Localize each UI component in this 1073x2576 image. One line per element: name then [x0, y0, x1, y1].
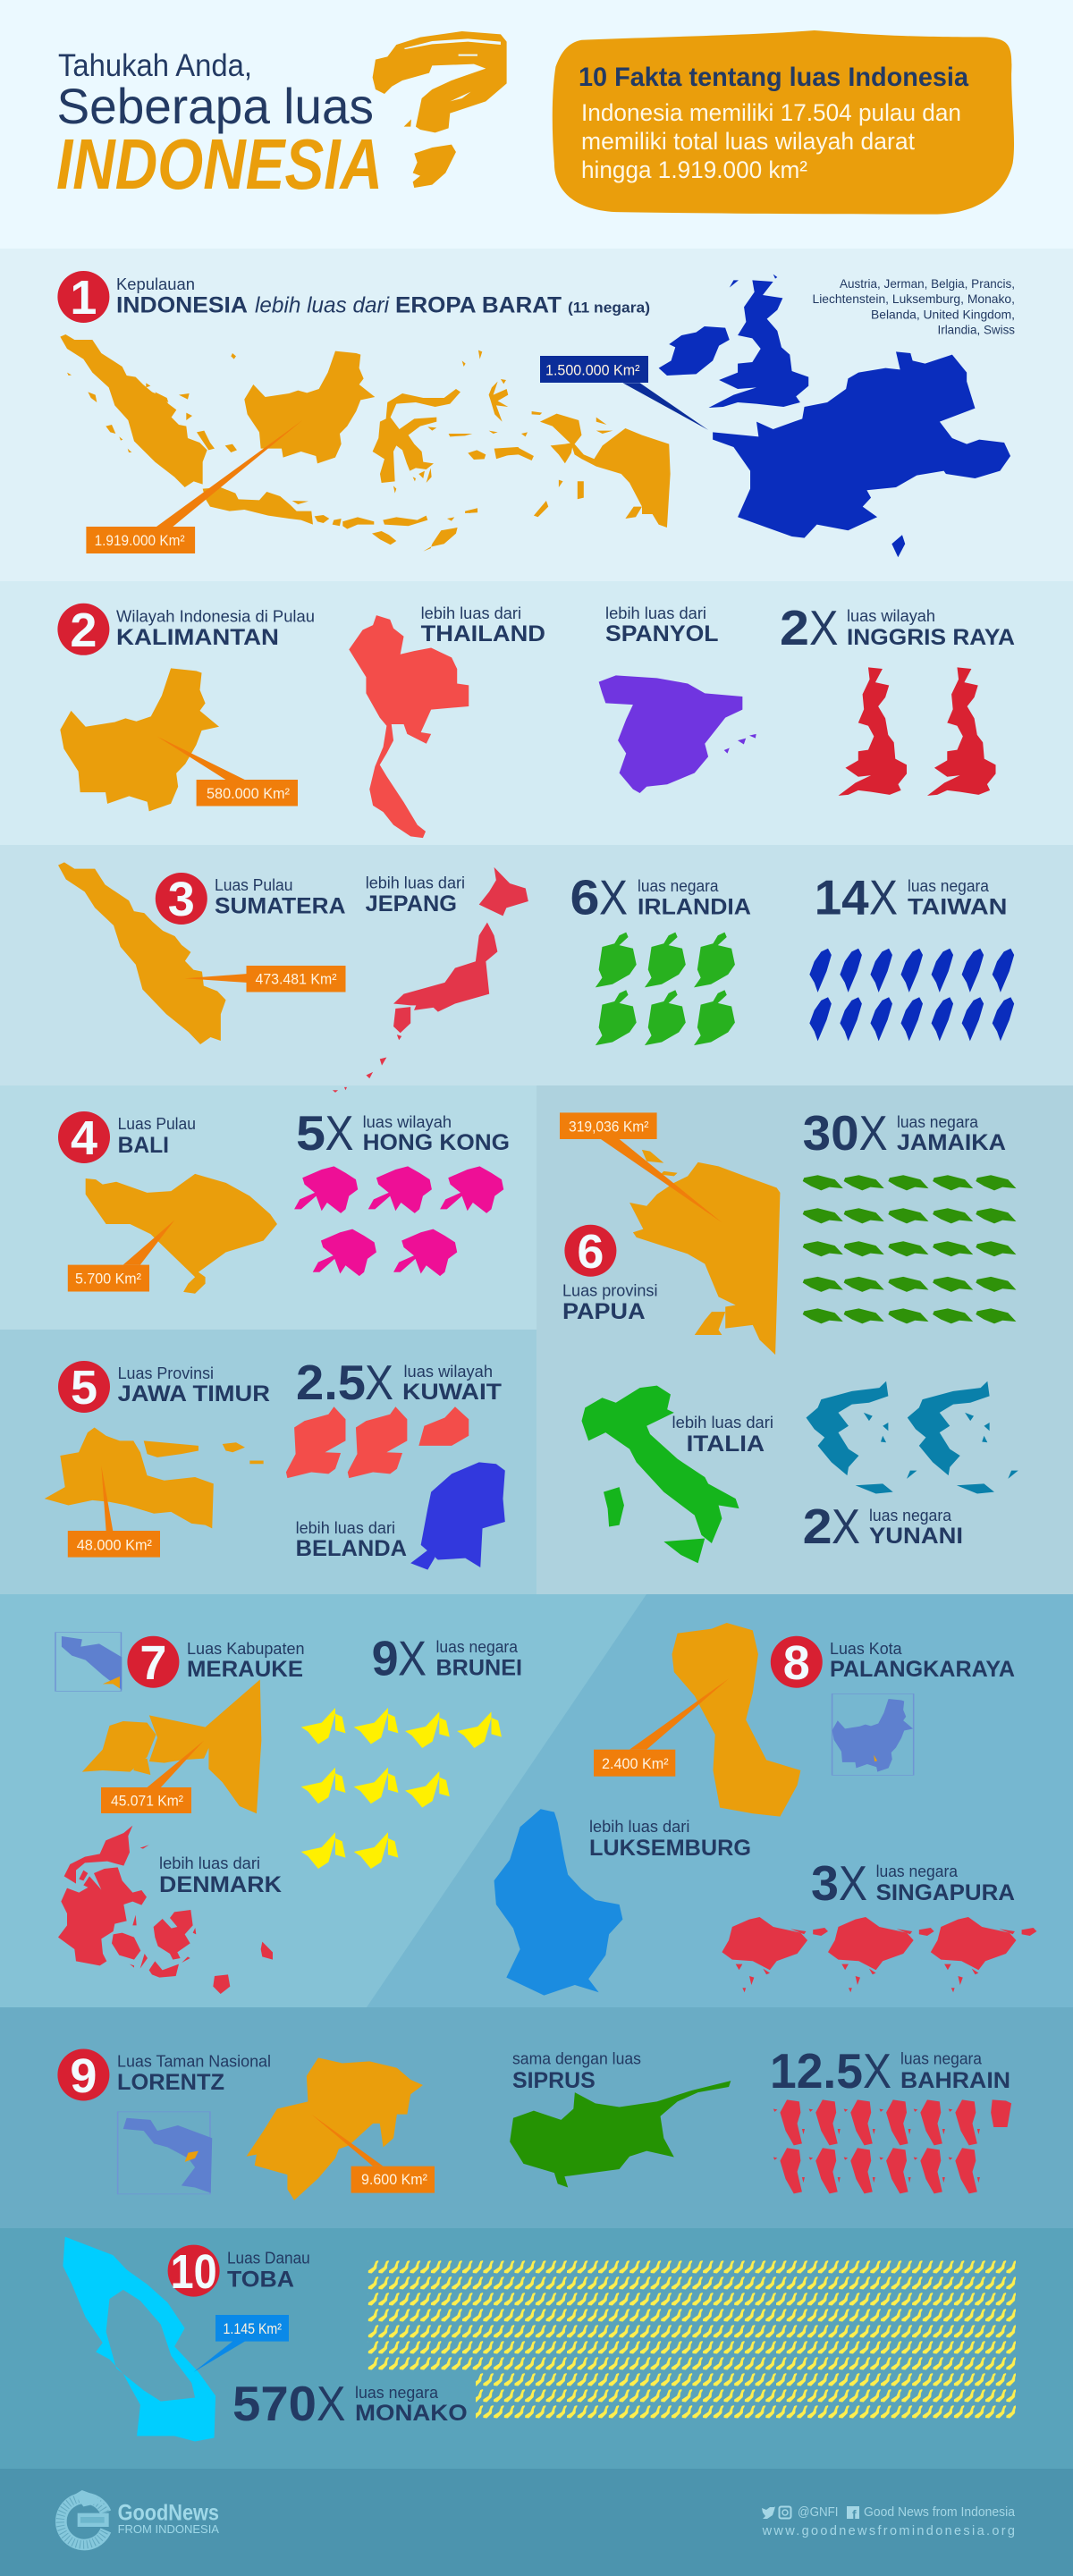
heading: 570X Monako: 570 [232, 2376, 317, 2431]
callout: 10 fakta: Indonesia memiliki 17.504 pulau dan [581, 99, 961, 126]
heading: 2X Yunani: YUNANI [869, 1524, 963, 1549]
badge 5: 5 [71, 1361, 97, 1415]
heading: 3X Singapura: X [839, 1855, 867, 1911]
heading: 3X Singapura [811, 1855, 1015, 1911]
heading: Luksemburg [589, 1817, 751, 1861]
text: list of countries: Belanda, United Kingdom, [871, 308, 1015, 322]
heading: 2X Yunani [803, 1499, 963, 1554]
callout: 580.000 km2 [157, 737, 298, 807]
badge 6 [564, 1225, 616, 1279]
heading: Siprus: SIPRUS [512, 2068, 596, 2093]
map: Kalimantan [60, 668, 219, 811]
heading: Spanyol: lebih luas dari [605, 604, 706, 622]
heading: Thailand: THAILAND [421, 621, 545, 646]
badge 3: 3 [168, 873, 195, 926]
map: Jawa Timur [45, 1428, 264, 1528]
icons: 3 Singapore maps [722, 1917, 1036, 1992]
map: Belanda [410, 1462, 505, 1570]
inset: Kalimantan locator [832, 1693, 914, 1775]
heading: 3X Singapura: SINGAPURA [876, 1880, 1015, 1905]
heading fact 1: Kepulauan [116, 274, 195, 293]
callout: 319,036 km2 [560, 1112, 722, 1222]
heading: 570X Monako: MONAKO [355, 2401, 468, 2426]
callout: 1.145 km2: 1.145 Km² [224, 2320, 282, 2337]
heading: Bali: BALI [118, 1133, 169, 1158]
heading: 14X Taiwan: 14 [815, 870, 869, 925]
heading: Jawa Timur: Luas Provinsi [118, 1364, 214, 1382]
heading: 6X Irlandia: luas negara [638, 876, 719, 895]
icon: Japan island tail [333, 1087, 347, 1093]
text: list of countries: Austria, Jerman, Belgia, Prancis, [840, 276, 1015, 291]
heading: Bali: Luas Pulau [118, 1114, 196, 1133]
map: Thailand [349, 615, 469, 838]
map: Cyprus [510, 2081, 731, 2187]
heading: Palangkaraya [830, 1639, 1015, 1682]
heading: 570X Monako: luas negara [355, 2383, 439, 2402]
heading fact 1: (11 negara) [568, 299, 650, 317]
heading: 5X Hong Kong [296, 1105, 510, 1161]
heading: Thailand: lebih luas dari [421, 604, 521, 622]
badge 7 [127, 1636, 179, 1690]
text: website: www.goodnewsfromindonesia.org [762, 2524, 1015, 2538]
heading: 12.5X Bahrain [770, 2043, 1010, 2099]
heading: 2.5X Kuwait: X [365, 1355, 393, 1410]
heading: 3X Singapura: luas negara [876, 1862, 959, 1880]
heading: 30X Jamaika: luas negara [897, 1112, 979, 1131]
heading fact 1 [116, 274, 650, 318]
callout: 319,036 km2: 319,036 Km² [569, 1118, 649, 1136]
heading: 570X Monako [232, 2376, 468, 2431]
heading: Lorentz: LORENTZ [117, 2070, 224, 2095]
icons: 30 Jamaica maps [803, 1175, 1016, 1323]
icons: 9 Brunei maps [301, 1708, 502, 1869]
heading: 30X Jamaika [803, 1105, 1006, 1161]
badge 7: 7 [139, 1636, 166, 1690]
badge 6: 6 [577, 1225, 604, 1279]
heading: Jepang: JEPANG [366, 891, 457, 916]
heading: 12.5X Bahrain: 12.5 [770, 2043, 863, 2099]
callout: 48.000 km2: 48.000 Km² [77, 1536, 152, 1554]
title: INDONESIA: INDONESIA [56, 124, 383, 204]
heading: 570X Monako: X [317, 2376, 345, 2431]
icons: 2.5 Kuwait maps [286, 1406, 469, 1478]
heading: 2X Inggris Raya: X [809, 600, 839, 655]
callout: 45.071 km2 [101, 1741, 204, 1813]
badge 2 [57, 604, 109, 657]
heading: Palangkaraya: PALANGKARAYA [830, 1657, 1015, 1682]
callout: 580.000 km2: 580.000 Km² [207, 785, 290, 802]
heading: Lorentz [117, 2051, 271, 2095]
panel: fact 2 [0, 581, 1073, 845]
map: Italy [582, 1386, 739, 1563]
heading: Italia [672, 1413, 773, 1457]
panel: header [0, 0, 1073, 249]
heading: 12.5X Bahrain: X [863, 2043, 891, 2099]
panel: fact 9 [0, 2007, 1073, 2228]
badge 9 [57, 2049, 109, 2103]
map: Japan [366, 867, 528, 1078]
heading: Toba [227, 2248, 310, 2293]
map: Lorentz [247, 2057, 423, 2200]
heading: 5X Hong Kong: luas wilayah [363, 1112, 452, 1131]
heading: Kalimantan [116, 606, 315, 650]
map: Luksemburg [494, 1809, 622, 1996]
heading: Merauke [187, 1639, 305, 1682]
callout: 45.071 km2: 45.071 Km² [111, 1792, 183, 1809]
heading: Spanyol [605, 604, 719, 646]
callout: 10 fakta [553, 30, 1014, 215]
heading: 14X Taiwan [815, 870, 1007, 925]
panel: fact 6 [536, 1085, 1073, 1594]
icon: instagram [780, 2507, 790, 2518]
heading: 6X Irlandia: X [599, 870, 628, 925]
logo: GoodNews text [118, 2500, 219, 2536]
map: Danau Toba [63, 2237, 215, 2442]
heading: 14X Taiwan: TAIWAN [908, 895, 1007, 920]
map: Denmark [58, 1826, 273, 1994]
heading: Toba: TOBA [227, 2268, 294, 2293]
heading: Lorentz: Luas Taman Nasional [117, 2051, 271, 2071]
inset: Papua locator [55, 1633, 122, 1691]
icon: twitter [762, 2506, 775, 2519]
panel: fact 4 [0, 1085, 536, 1330]
text: list of countries: Irlandia, Swiss [937, 322, 1015, 336]
callout: 473.481 km2: 473.481 Km² [256, 971, 337, 988]
panel: fact 5 [0, 1330, 536, 1594]
callout: 473.481 km2 [185, 966, 345, 992]
heading: Siprus: sama dengan luas [512, 2049, 641, 2068]
icons: 570 Monaco maps [368, 2260, 1016, 2421]
heading: Palangkaraya: Luas Kota [830, 1639, 902, 1658]
text: list of countries [812, 276, 1015, 336]
heading: Papua: Luas provinsi [562, 1281, 658, 1300]
map: Indonesia [60, 334, 671, 552]
map: Bali [86, 1174, 277, 1294]
heading: 30X Jamaika: 30 [803, 1105, 859, 1161]
panel: footer [0, 2469, 1073, 2576]
heading: Thailand [421, 604, 545, 646]
icons: 6 Ireland maps [596, 933, 735, 1045]
callout: 1.919.000 km2 [86, 420, 302, 553]
callout: 1.919.000 km2: 1.919.000 Km² [95, 532, 185, 549]
callout: 9.600 km2: 9.600 Km² [361, 2171, 427, 2188]
heading: Belanda: lebih luas dari [296, 1518, 395, 1537]
map: Merauke [82, 1679, 261, 1813]
text: Good News from Indonesia: Good News from Indonesia [864, 2504, 1016, 2520]
heading: 30X Jamaika: JAMAIKA [897, 1130, 1006, 1155]
map: Spain [599, 675, 756, 793]
heading: 14X Taiwan: luas negara [908, 876, 990, 895]
callout: 9.600 km2 [311, 2115, 435, 2193]
heading: Merauke: MERAUKE [187, 1657, 303, 1682]
heading: Denmark: lebih luas dari [159, 1854, 260, 1872]
badge 2: 2 [70, 604, 97, 657]
callout: 2.400 km2: 2.400 Km² [602, 1755, 669, 1772]
heading: Denmark: DENMARK [159, 1872, 282, 1897]
callout: 10 fakta: hingga 1.919.000 km² [581, 156, 807, 183]
callout: 1.500.000 km2 [540, 356, 708, 430]
heading: 9X Brunei: 9 [372, 1630, 399, 1685]
heading: Belanda [296, 1518, 407, 1561]
icons: 14 Taiwan maps [809, 949, 1014, 1041]
heading: 2X Inggris Raya: luas wilayah [847, 606, 935, 625]
heading: 2X Yunani: 2 [803, 1499, 832, 1554]
heading: Merauke: Luas Kabupaten [187, 1639, 305, 1658]
icons: 12.5 Bahrain maps [773, 2099, 1011, 2193]
heading: 2.5X Kuwait: luas wilayah [404, 1362, 493, 1381]
heading: 2X Yunani: X [832, 1499, 860, 1554]
heading: 6X Irlandia: 6 [570, 870, 599, 925]
panel: fact 8 [367, 1594, 1073, 2007]
callout: 5.700 km2: 5.700 Km² [75, 1271, 141, 1288]
badge 3 [156, 873, 207, 926]
heading: Jawa Timur [118, 1364, 270, 1406]
heading: Bali [118, 1114, 196, 1158]
heading: Kalimantan: Wilayah Indonesia di Pulau [116, 606, 315, 625]
badge 1 [57, 271, 109, 325]
heading: 2.5X Kuwait: 2.5 [296, 1355, 366, 1410]
text: GNFI handle: @GNFI [798, 2504, 839, 2520]
icons: 2 UK maps [838, 667, 996, 796]
badge 8 [771, 1636, 823, 1690]
icon: facebook [847, 2506, 859, 2521]
badge 5 [58, 1361, 110, 1415]
title: Tahukah Anda: Tahukah Anda, [58, 48, 252, 83]
heading: 30X Jamaika: X [859, 1105, 888, 1161]
icons: 5 Hong Kong maps [294, 1166, 503, 1276]
heading: Toba: Luas Danau [227, 2248, 310, 2268]
callout: 10 fakta: 10 Fakta tentang luas Indonesia [579, 63, 968, 92]
callout: 2.400 km2 [594, 1678, 729, 1777]
heading: Sumatera: Luas Pulau [215, 875, 293, 894]
logo: GoodNews emblem [60, 2490, 109, 2545]
heading: Jepang [366, 873, 465, 916]
title: Seberapa luas: Seberapa luas [57, 78, 374, 134]
heading: Jepang: lebih luas dari [366, 873, 465, 892]
panel: fact 7 [0, 1594, 1073, 2007]
inset: Papua locator [118, 2112, 212, 2194]
panel: fact 1 [0, 249, 1073, 581]
text: list of countries: Liechtenstein, Luksemburg, Monako, [812, 291, 1015, 306]
heading: Denmark [159, 1854, 282, 1897]
heading: Kalimantan: KALIMANTAN [116, 625, 279, 650]
heading: Italia: lebih luas dari [672, 1413, 773, 1432]
heading: Sumatera [215, 875, 345, 919]
badge 4 [58, 1111, 110, 1165]
heading: 2X Inggris Raya: 2 [780, 600, 809, 655]
heading: Spanyol: SPANYOL [605, 621, 719, 646]
heading: Jawa Timur: JAWA TIMUR [118, 1381, 270, 1406]
callout: 10 fakta: memiliki total luas wilayah darat [581, 128, 915, 155]
heading: 2X Yunani: luas negara [869, 1506, 952, 1524]
heading: 9X Brunei: X [398, 1630, 427, 1685]
logo: GoodNews text: FROM INDONESIA [118, 2522, 219, 2536]
heading: 5X Hong Kong: HONG KONG [363, 1130, 510, 1155]
panel: fact 3 [0, 845, 1073, 1085]
callout: 1.500.000 km2: 1.500.000 Km² [545, 361, 640, 379]
heading: 5X Hong Kong: 5 [296, 1105, 325, 1161]
badge 9: 9 [70, 2049, 97, 2103]
heading: 2.5X Kuwait: KUWAIT [402, 1380, 502, 1405]
heading: Luksemburg: LUKSEMBURG [589, 1836, 751, 1861]
heading: Papua [562, 1281, 658, 1324]
heading: Siprus [512, 2049, 641, 2093]
heading fact 1: EROPA BARAT [395, 293, 562, 318]
map: Western Europe [659, 274, 1010, 557]
map: Papua [629, 1150, 780, 1355]
heading: 6X Irlandia: IRLANDIA [638, 895, 751, 920]
map: Palangkaraya [672, 1623, 800, 1817]
heading: 9X Brunei: luas negara [436, 1637, 519, 1656]
callout: 5.700 km2 [68, 1220, 174, 1291]
heading fact 1: INDONESIA [116, 293, 248, 318]
heading: 2.5X Kuwait [296, 1355, 502, 1410]
icon: brush question mark [373, 31, 507, 188]
heading: Italia: ITALIA [687, 1432, 765, 1457]
callout: 48.000 km2 [68, 1465, 160, 1558]
heading: Belanda: BELANDA [296, 1536, 407, 1561]
badge 4: 4 [71, 1111, 97, 1165]
icon: facebook: f [852, 2507, 857, 2521]
heading: Sumatera: SUMATERA [215, 894, 345, 919]
heading: 5X Hong Kong: X [325, 1105, 354, 1161]
heading: 12.5X Bahrain: BAHRAIN [900, 2068, 1010, 2093]
heading fact 1: lebih luas dari [255, 293, 390, 318]
logo: GoodNews text: GoodNews [118, 2500, 219, 2525]
heading: 6X Irlandia [570, 870, 751, 925]
icons: 2 Greece maps [807, 1381, 1018, 1494]
heading: Luksemburg: lebih luas dari [589, 1817, 689, 1836]
callout: 1.145 km2 [194, 2315, 289, 2372]
heading: 9X Brunei: BRUNEI [436, 1655, 522, 1680]
map: Sumatera [58, 862, 226, 1044]
heading: Papua: PAPUA [562, 1299, 646, 1324]
heading: 14X Taiwan: X [869, 870, 898, 925]
badge 10: 10 [171, 2245, 217, 2299]
badge 1: 1 [70, 271, 97, 325]
heading: 3X Singapura: 3 [811, 1855, 839, 1911]
panel: fact 10 [0, 2228, 1073, 2469]
heading: 12.5X Bahrain: luas negara [900, 2049, 983, 2068]
heading: 2X Inggris Raya: INGGRIS RAYA [847, 625, 1015, 650]
badge 8: 8 [783, 1636, 810, 1690]
heading: 2X Inggris Raya [780, 600, 1015, 655]
heading: 9X Brunei [372, 1630, 522, 1685]
